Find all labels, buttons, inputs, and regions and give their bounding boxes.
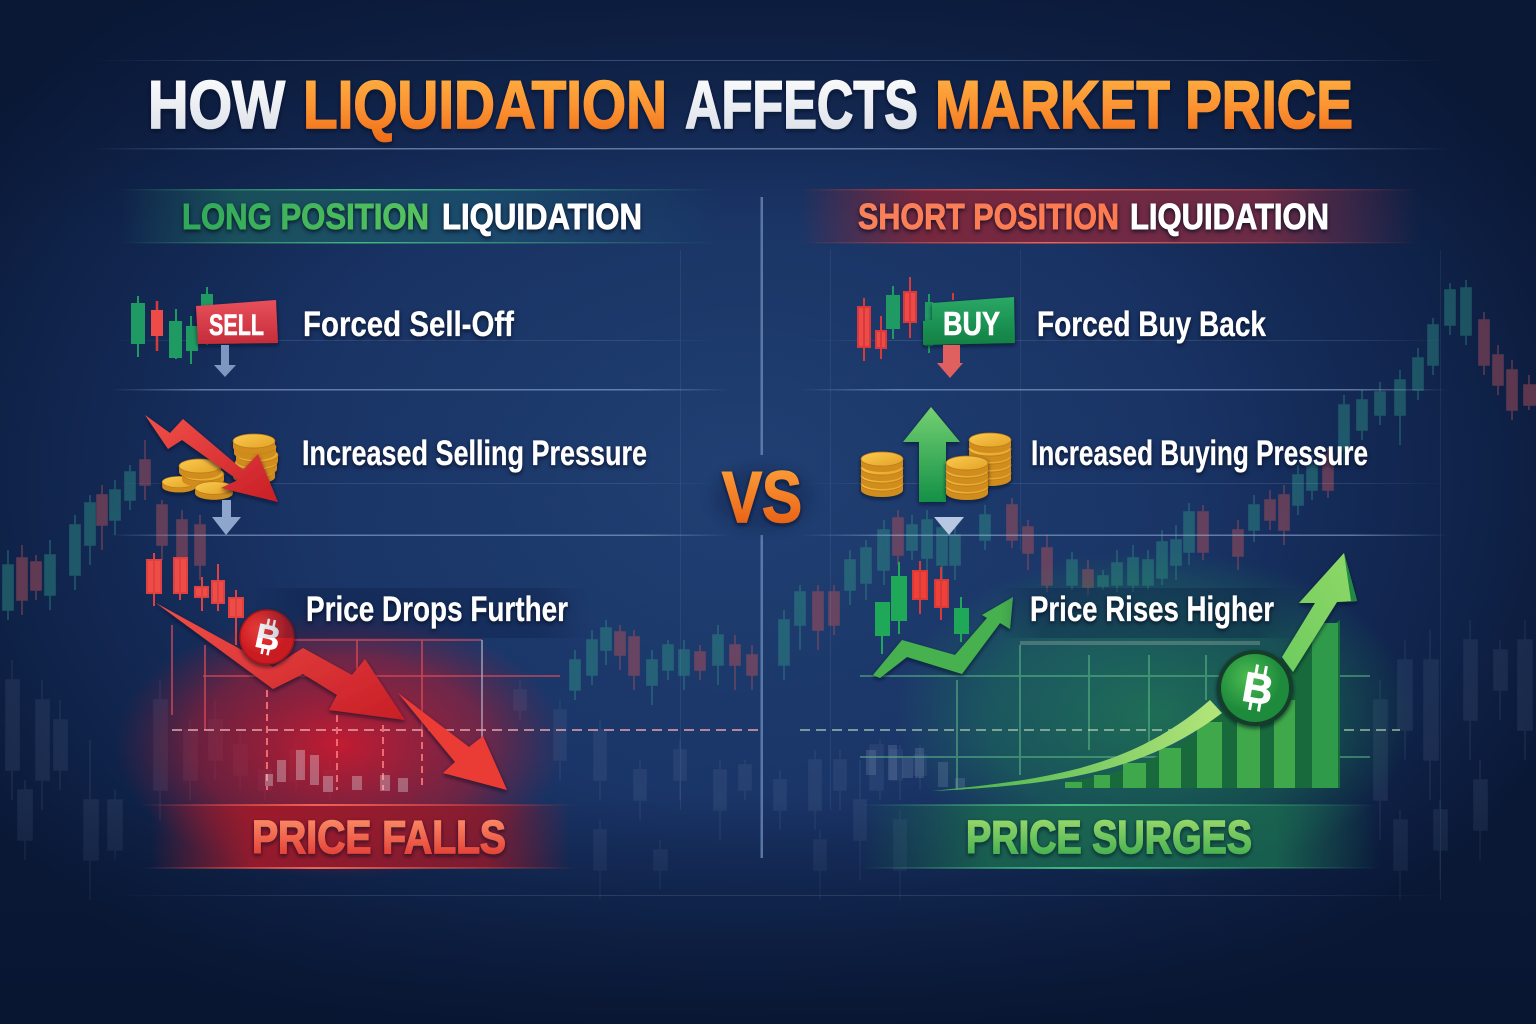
result banner: price surges: PRICE SURGES — [966, 811, 1252, 863]
icon: bitcoin coin red — [240, 610, 294, 664]
panel: short position liquidation — [800, 189, 1420, 880]
icon: bitcoin coin green: B — [1239, 663, 1277, 714]
heading: long position liquidation: LIQUIDATION — [442, 196, 642, 237]
text: forced sell-off: Forced Sell-Off — [303, 305, 514, 344]
icon: bitcoin coin green — [1217, 650, 1293, 726]
result banner: price falls — [140, 804, 580, 869]
text: price drops further: Price Drops Further — [306, 590, 568, 629]
arrow: down to price drop — [212, 500, 241, 535]
icon: sell candles and tag — [132, 287, 278, 364]
text: increased buying pressure: Increased Buying Pressure — [1031, 434, 1368, 473]
icon: bitcoin coin red: B — [252, 617, 284, 659]
icon: sell candles and tag: SELL — [209, 309, 264, 342]
text: price rises higher — [1000, 588, 1300, 638]
heading: long position liquidation: LONG POSITION — [182, 196, 429, 237]
icon: coins with rising arrow — [861, 407, 1011, 502]
vs badge: VS — [722, 458, 802, 538]
heading: long position liquidation — [120, 189, 720, 244]
arrow: down to buying pressure — [937, 345, 963, 378]
heading: short position liquidation — [800, 189, 1420, 244]
text: price drops further — [250, 588, 590, 638]
heading: short position liquidation: SHORT POSITION — [858, 196, 1119, 237]
arrow: down to selling pressure — [214, 345, 236, 377]
text: increased selling pressure: Increased Selling Pressure — [302, 434, 647, 473]
icon: coins with falling arrow — [145, 415, 278, 502]
background candlestick chart — [3, 280, 1536, 900]
chart: price falling — [115, 553, 760, 880]
icon: buy candles and tag: BUY — [943, 305, 1000, 342]
text: forced buy back: Forced Buy Back — [1037, 305, 1266, 344]
text: price rises higher: Price Rises Higher — [1030, 590, 1274, 629]
title — [90, 60, 1450, 150]
arrow: down to price rise — [934, 517, 964, 535]
result banner: price falls: PRICE FALLS — [252, 811, 506, 863]
heading: short position liquidation: LIQUIDATION — [1130, 196, 1329, 237]
center divider — [760, 197, 763, 858]
title: LIQUIDATION — [303, 67, 667, 143]
icon: buy candles and tag — [858, 277, 1015, 361]
panel: long position liquidation — [115, 189, 760, 880]
result banner: price surges — [860, 804, 1380, 869]
panel: row separators — [110, 250, 1450, 900]
title: HOW — [148, 67, 286, 143]
title: AFFECTS — [685, 67, 918, 143]
title: MARKET PRICE — [935, 67, 1353, 143]
chart: price surging — [800, 550, 1415, 880]
